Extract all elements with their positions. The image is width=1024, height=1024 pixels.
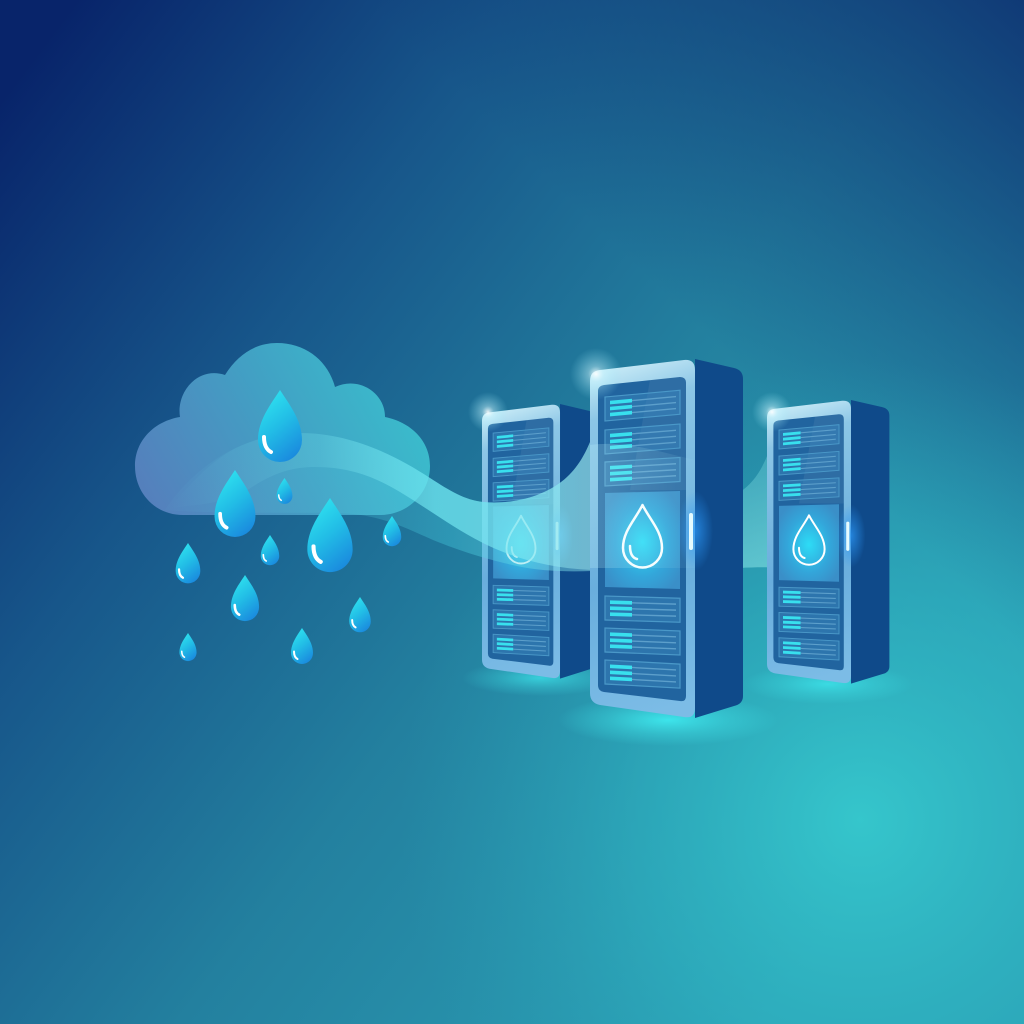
stream: full band: [165, 433, 592, 571]
raindrops: [176, 390, 401, 664]
drop: [307, 498, 353, 572]
drop: [277, 478, 292, 504]
server: right rack: [767, 400, 889, 684]
drop: [349, 597, 371, 632]
corner highlights on racks: [468, 348, 792, 432]
drop: [383, 516, 401, 546]
server: left rack: [482, 404, 596, 679]
drop: [231, 575, 259, 621]
water stream ribbon from cloud into servers: [165, 433, 592, 571]
stream seen through centre rack glass: [590, 444, 695, 568]
stream segment between centre and right racks: [740, 430, 830, 568]
stream: bright upper band: [170, 433, 592, 570]
server: centre rack: [590, 359, 743, 718]
floor glow under servers: [462, 660, 913, 746]
drop: [176, 543, 200, 583]
drop: [179, 633, 197, 661]
drop: [291, 628, 313, 664]
cloud: [135, 343, 430, 515]
drop: [258, 390, 302, 462]
drop: [261, 535, 279, 565]
drop: [215, 470, 255, 537]
